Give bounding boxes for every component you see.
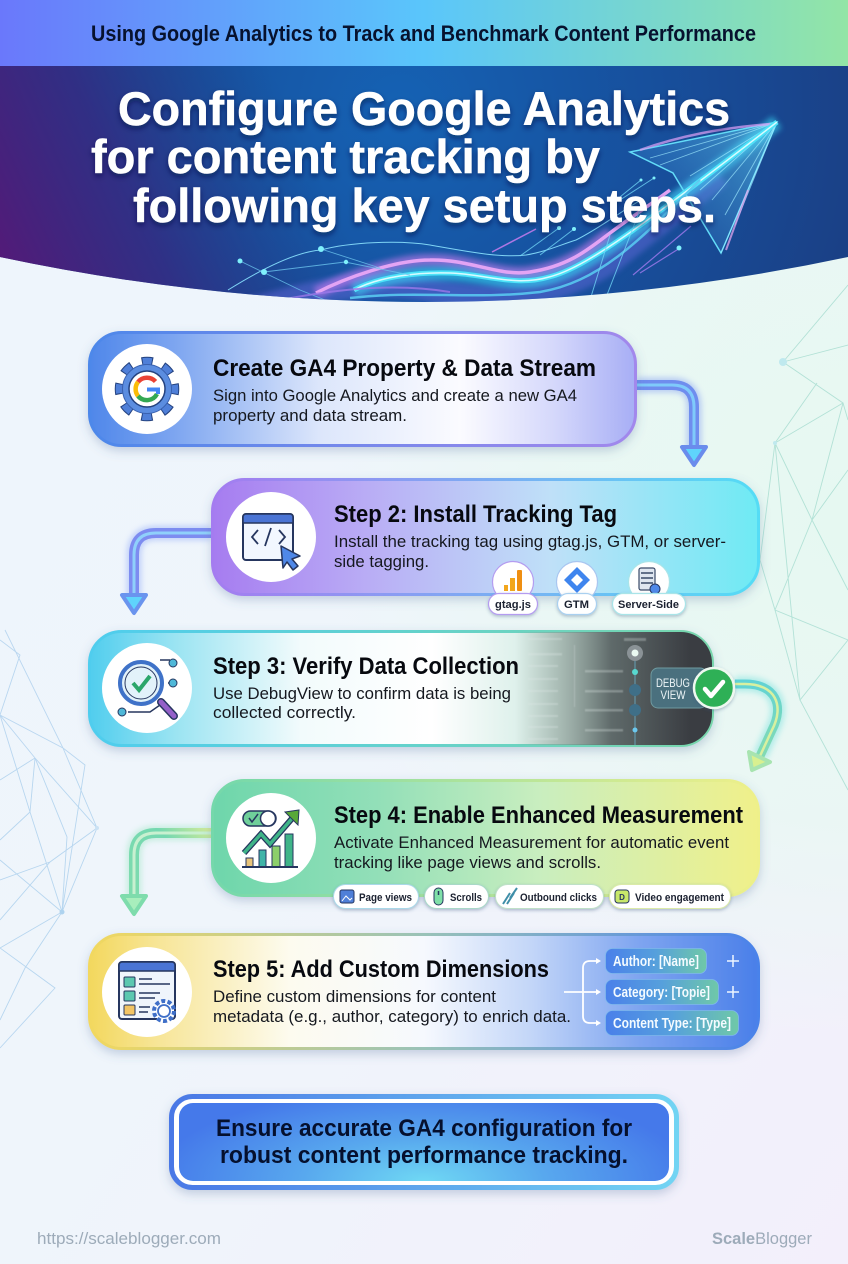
pill: Outbound clicks: [496, 884, 604, 908]
panel: step 4: [212, 780, 758, 908]
callout: conclusion: robust content performance tracking.: [220, 1142, 628, 1169]
debug view badge: DEBUG: [656, 676, 690, 690]
icon: green check: [694, 668, 734, 708]
tag: Content Type: Content Type: [Type]: [613, 1016, 731, 1032]
arrow: step 4 to step 5: [122, 833, 211, 914]
panel: step 5: [90, 934, 758, 1048]
tag: Content Type: [606, 1010, 738, 1036]
top banner: [0, 0, 848, 66]
step 5 description: [213, 987, 571, 1026]
hero panel: [0, 66, 848, 310]
hero illustration: glowing arrow and data waves: [228, 122, 777, 310]
badge: GTM: [556, 562, 598, 614]
decorative network: right: [760, 285, 848, 790]
callout: conclusion: Ensure accurate GA4 configuration for: [216, 1115, 632, 1142]
step 3 description: collected correctly.: [213, 703, 356, 722]
step 1 description: property and data stream.: [213, 406, 407, 425]
pill: Video engagement: Video engagement: [635, 892, 724, 904]
tag: Category: Category: [Topie]: [613, 985, 710, 1001]
step 2 description: [334, 532, 726, 571]
step 2 title: Step 2: Install Tracking Tag: [334, 501, 617, 528]
pill: Video engagement: [610, 884, 730, 908]
footer: url: https://scaleblogger.com: [37, 1229, 221, 1248]
hero title: [91, 83, 730, 233]
arrow: step 2 to step 3: [122, 533, 211, 613]
step 3 description: Use DebugView to confirm data is being: [213, 684, 511, 703]
wave band underlay: [250, 175, 720, 310]
arrow outline: [630, 122, 777, 253]
step 3 title: Step 3: Verify Data Collection: [213, 653, 519, 680]
step 2 description: Install the tracking tag using gtag.js, GTM, or server-: [334, 532, 726, 551]
tag: Author: Author: [Name]: [613, 954, 699, 970]
hero title: for content tracking by: [91, 131, 601, 184]
debug view badge: [651, 668, 707, 708]
pill: Video engagement: D: [619, 893, 625, 902]
step 1 description: Sign into Google Analytics and create a new GA4: [213, 386, 577, 405]
decorative network: left: [0, 630, 99, 1048]
step 2 description: side tagging.: [334, 552, 429, 571]
step 4 description: Activate Enhanced Measurement for automatic event: [334, 833, 729, 852]
tag: Author: [606, 948, 706, 974]
icon: code window with cursor: [226, 492, 316, 582]
badge: Server-Side: [612, 562, 686, 614]
step 1 title: Create GA4 Property & Data Stream: [213, 355, 596, 382]
data waves: [354, 122, 777, 290]
pill: Page views: [334, 884, 418, 908]
icon: dashboard with gear: [102, 947, 192, 1037]
arrow: step 1 to step 2: [637, 385, 706, 465]
pill: Page views: Page views: [359, 892, 412, 904]
pill: Outbound clicks: Outbound clicks: [520, 892, 597, 904]
debug view badge: VIEW: [660, 688, 686, 702]
step 1 description: [213, 386, 577, 425]
step 5 description: Define custom dimensions for content: [213, 987, 496, 1006]
connector: branching lines: [564, 958, 601, 1026]
banner title: Using Google Analytics to Track and Benchmark Content Performance: [91, 21, 756, 46]
icon: magnifier with check: [102, 643, 192, 733]
debug console panel: [515, 632, 713, 745]
step 4 title: Step 4: Enable Enhanced Measurement: [334, 802, 743, 829]
tag: Category: [606, 980, 718, 1004]
icon: plus signs: [727, 955, 739, 998]
step 4 description: [334, 833, 729, 872]
badge: gtag.js: [488, 562, 538, 614]
step 5 description: metadata (e.g., author, category) to enrich data.: [213, 1007, 571, 1026]
badge: GTM: GTM: [564, 599, 589, 611]
panel: step 1: [90, 332, 636, 446]
panel: step 2: [212, 480, 758, 614]
badge: Server-Side: Server-Side: [618, 599, 679, 611]
pill: Scrolls: Scrolls: [450, 892, 482, 904]
callout: conclusion: [172, 1096, 676, 1188]
step 4 description: tracking like page views and scrolls.: [334, 853, 601, 872]
icon: Google gear: [102, 344, 192, 434]
footer: brand: ScaleBlogger: [712, 1229, 812, 1248]
hero title: Configure Google Analytics: [118, 83, 730, 136]
arrow: step 3 to step 4: [735, 684, 778, 770]
step 3 description: [213, 684, 511, 722]
panel: step 3: [90, 632, 734, 746]
hero title: following key setup steps.: [133, 180, 716, 233]
icon: growth chart with toggle: [226, 793, 316, 883]
pill: Scrolls: [424, 884, 488, 908]
badge: gtag.js: gtag.js: [495, 599, 531, 611]
step 5 title: Step 5: Add Custom Dimensions: [213, 956, 549, 983]
